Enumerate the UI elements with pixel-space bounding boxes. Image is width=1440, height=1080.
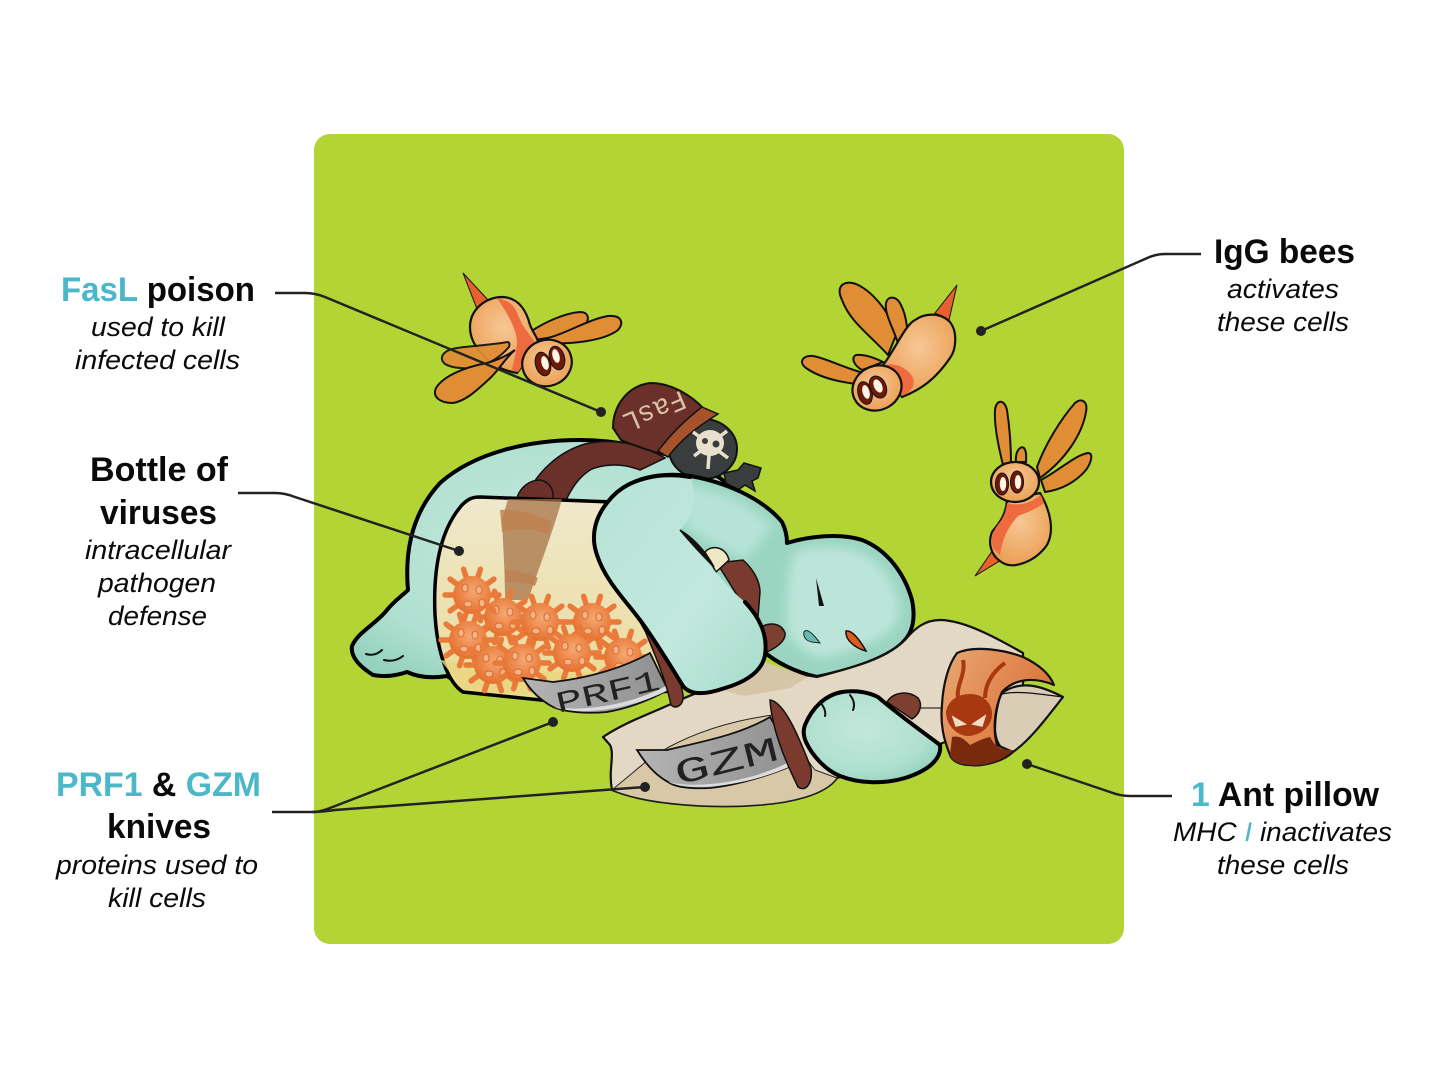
leader line: ant pillow	[1022, 759, 1172, 796]
GZM knife: GZM	[671, 731, 783, 795]
pillow shaded underside	[612, 715, 837, 806]
PRF1 knife	[523, 633, 683, 723]
poison bottle labelled FasL	[613, 382, 761, 491]
illustration: right bee	[975, 400, 1091, 576]
ant figure	[946, 660, 1013, 765]
label: PRF1 and GZM knives: proteins used to	[55, 850, 258, 880]
upper knife handle	[717, 560, 760, 617]
label: ant pillow: MHC I inactivates	[1173, 817, 1392, 847]
label: PRF1 and GZM knives: kill cells	[108, 883, 206, 913]
label: PRF1 and GZM knives: PRF1 & GZM	[56, 766, 261, 804]
nostril	[804, 630, 820, 643]
pommel of PRF1 knife	[763, 624, 785, 652]
closed eye	[816, 578, 824, 606]
label: FasL poison: used to kill	[91, 312, 226, 342]
label: PRF1 and GZM knives: knives	[107, 808, 211, 846]
label: ant pillow: 1 Ant pillow	[1191, 776, 1380, 814]
leader line: IgG bees	[976, 254, 1201, 336]
turtle arm hugging jar	[594, 475, 766, 693]
label: bottle of viruses: pathogen	[97, 568, 216, 598]
label: IgG bees: IgG bees	[1214, 233, 1355, 271]
icon: skull and crossbones	[693, 430, 728, 469]
label: IgG bees	[1214, 233, 1355, 337]
label: bottle of viruses: intracellular	[85, 535, 232, 565]
ant pillow sleeve	[920, 649, 1063, 765]
strap seen through jar	[500, 499, 562, 600]
label: bottle of viruses: defense	[108, 601, 207, 631]
label: ant pillow: these cells	[1217, 850, 1349, 880]
poison bottle labelled FasL: FasL	[617, 382, 690, 436]
jar of viruses	[435, 497, 680, 702]
shoulder highlight	[660, 482, 772, 560]
red eye	[846, 631, 866, 651]
illustration: upper-right bee	[802, 283, 957, 419]
label: PRF1 and GZM knives	[55, 766, 261, 913]
label: IgG bees: activates	[1227, 274, 1339, 304]
leather strap	[517, 442, 665, 500]
pillow	[603, 620, 1023, 806]
label: FasL poison: infected cells	[75, 345, 240, 375]
label: bottle of viruses: viruses	[100, 494, 217, 532]
label: ant pillow	[1173, 776, 1392, 880]
leader line: FasL poison	[275, 293, 606, 417]
turtle hand on pillow	[804, 691, 940, 782]
turtle body and hind flipper	[352, 440, 770, 690]
label: bottle of viruses: Bottle of	[90, 451, 229, 489]
leader lines: PRF1 and GZM knives	[272, 717, 650, 812]
panel: green illustration background	[314, 134, 1124, 944]
PRF1 knife: PRF1	[553, 666, 664, 723]
turtle shoulder and head	[612, 475, 914, 677]
turtle thumb	[705, 548, 729, 572]
label: FasL poison: FasL poison	[61, 271, 255, 309]
flipper toe creases	[366, 650, 403, 661]
label: FasL poison	[61, 271, 255, 375]
GZM knife	[637, 693, 920, 795]
label: IgG bees: these cells	[1217, 307, 1349, 337]
label: bottle of viruses	[85, 451, 232, 631]
head highlight	[787, 547, 898, 658]
leader line: bottle of viruses	[238, 493, 464, 556]
viruses	[441, 569, 650, 691]
illustration: upper-left bee	[435, 273, 621, 403]
illustration: sleeping turtle with bottle, jar, knives and pillow	[352, 382, 1063, 806]
